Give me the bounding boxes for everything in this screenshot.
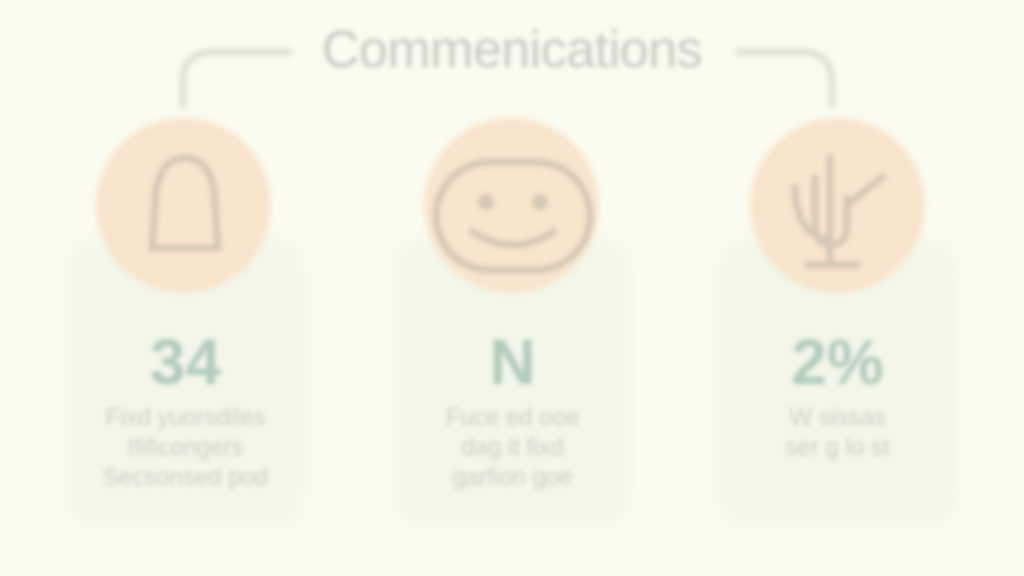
- number 3: 2%: [791, 326, 884, 398]
- text 3: ser g lo st: [785, 434, 890, 461]
- text 1: Secsonsed pod: [103, 464, 268, 491]
- text 2: dag it fixd: [461, 434, 564, 461]
- icon: bell: [147, 153, 223, 254]
- text 2: Fuce ed ooe: [446, 404, 579, 431]
- text 2: [446, 404, 579, 491]
- card 3: [720, 240, 955, 525]
- card 1: [68, 240, 303, 525]
- number 2: N: [489, 326, 536, 398]
- text 1: Fixd yuorsdiles: [105, 404, 266, 431]
- text 1: [103, 404, 268, 491]
- title: Commenications: [322, 21, 702, 79]
- circle 1: [96, 118, 271, 293]
- text 3: W sissas: [790, 404, 886, 431]
- icon: smile: [431, 156, 595, 276]
- icon: plant: [790, 154, 888, 270]
- circle 3: [750, 118, 925, 293]
- text 3: [785, 404, 890, 461]
- text 2: garfion goe: [452, 464, 573, 491]
- card 2: [395, 240, 630, 525]
- circle 2: [424, 118, 599, 293]
- number 1: 34: [150, 326, 221, 398]
- text 1: Ifificongers: [127, 434, 244, 461]
